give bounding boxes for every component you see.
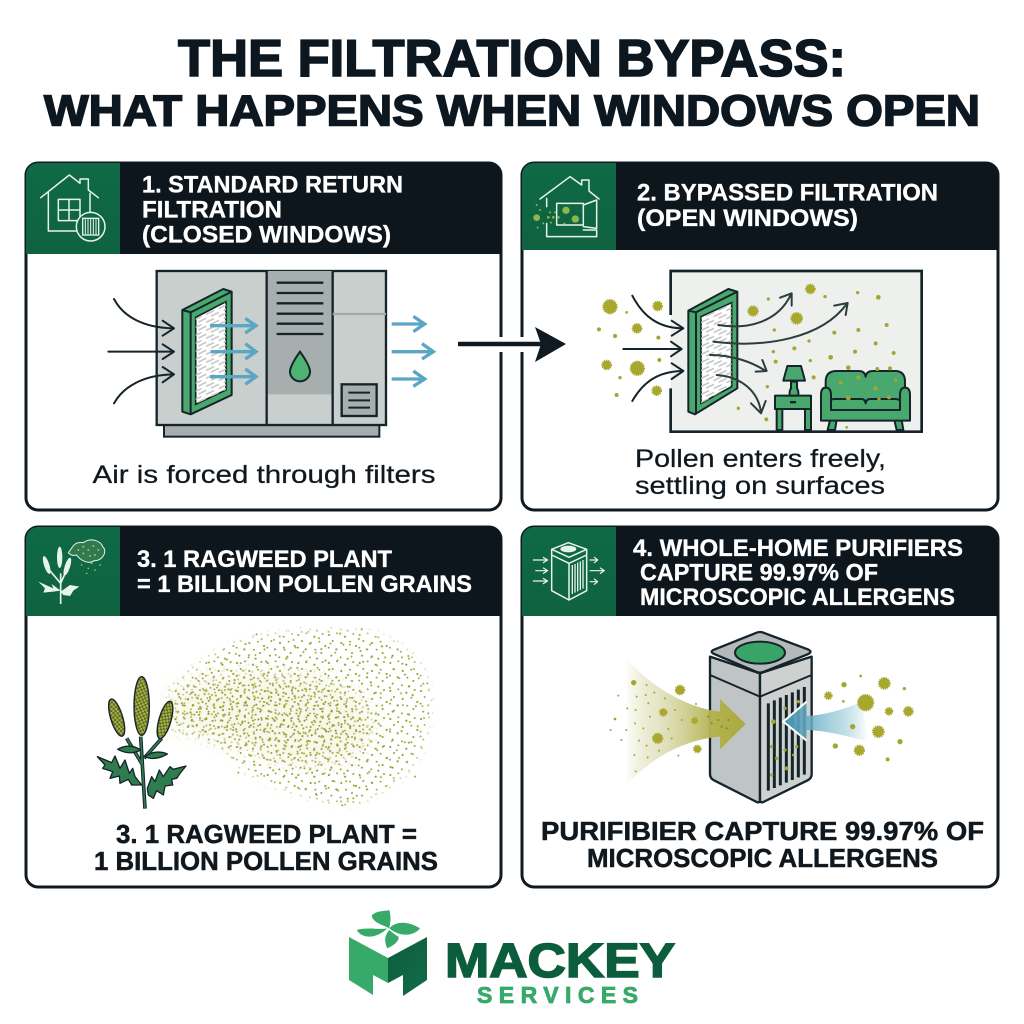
header bar: panel 4: CAPTURE 99.97% OF — [640, 560, 878, 586]
diagram: purifier capturing allergens — [610, 632, 913, 802]
caption: panel 2: settling on surfaces — [635, 472, 885, 500]
intake arrows — [108, 299, 174, 403]
header bar: panel 3 — [26, 527, 501, 616]
header bar: panel 4 — [522, 527, 998, 616]
header bar: panel 1: 1. STANDARD RETURN — [142, 172, 403, 198]
caption: panel 1: Air is forced through filters — [92, 461, 436, 489]
header bar: panel 1 — [26, 163, 501, 254]
incoming olive air arrow — [625, 657, 746, 787]
header bar: panel 2: 2. BYPASSED FILTRATION — [637, 180, 938, 206]
panel: whole-home purifiers — [522, 527, 998, 887]
header bar: panel 4: MICROSCOPIC ALLERGENS — [640, 584, 955, 611]
pollen particles — [610, 675, 913, 772]
bypassed filter frame — [688, 289, 737, 414]
arrow: panel 1 to panel 2 — [458, 327, 566, 362]
header bar: panel 4: 4. WHOLE-HOME PURIFIERS — [633, 535, 963, 562]
caption: panel 3: 1 BILLION POLLEN GRAINS — [94, 848, 438, 876]
panel: standard return filtration — [26, 163, 501, 510]
diagram: pollen entering room — [597, 271, 922, 432]
icon: side table with lamp — [775, 366, 811, 430]
logo mark — [349, 910, 427, 996]
icon: sofa — [821, 365, 910, 430]
header bar: panel 3: = 1 BILLION POLLEN GRAINS — [137, 571, 472, 598]
pollen cloud — [160, 627, 437, 810]
purifier body — [710, 632, 812, 802]
icon: purifier with airflow — [533, 543, 604, 600]
header bar: panel 2 — [522, 163, 998, 250]
vent — [342, 384, 377, 416]
caption: panel 4 — [541, 818, 984, 873]
logo subtitle: SERVICES — [477, 982, 638, 1008]
title — [44, 30, 980, 136]
header bar: panel 1: (CLOSED WINDOWS) — [142, 222, 391, 248]
header bar: panel 1: FILTRATION — [142, 196, 282, 224]
caption: panel 2 — [635, 445, 886, 500]
caption: panel 2: Pollen enters freely, — [635, 445, 886, 473]
room pollen — [597, 285, 896, 429]
panel: ragweed pollen — [26, 527, 501, 887]
airflow arrows — [623, 293, 848, 413]
logo wordmark: MACKEY — [445, 935, 675, 988]
icon: house with filter — [41, 175, 105, 241]
header bar: panel 3: 3. 1 RAGWEED PLANT — [137, 546, 392, 573]
logo: Mackey Services — [349, 910, 675, 1008]
caption: panel 3 — [94, 821, 438, 876]
icon: water drop — [290, 352, 310, 381]
panel: bypassed filtration — [522, 163, 998, 510]
filter frame — [182, 289, 232, 414]
incoming blue air arrow — [783, 702, 868, 742]
header bar: panel 2: (OPEN WINDOWS) — [637, 205, 858, 232]
icon: ragweed plant — [97, 677, 186, 809]
diagram: air handler with filter — [108, 271, 433, 437]
title: THE FILTRATION BYPASS: — [178, 30, 846, 88]
caption: panel 3: 3. 1 RAGWEED PLANT = — [116, 821, 417, 849]
title: WHAT HAPPENS WHEN WINDOWS OPEN — [44, 86, 980, 136]
caption: panel 4: PURIFIBIER CAPTURE 99.97% OF — [541, 818, 984, 846]
icon: open house with pollen — [533, 177, 599, 237]
blue airflow arrows — [210, 316, 433, 386]
caption: panel 4: MICROSCOPIC ALLERGENS — [587, 845, 938, 873]
icon: ragweed with pollen cloud — [38, 540, 105, 604]
